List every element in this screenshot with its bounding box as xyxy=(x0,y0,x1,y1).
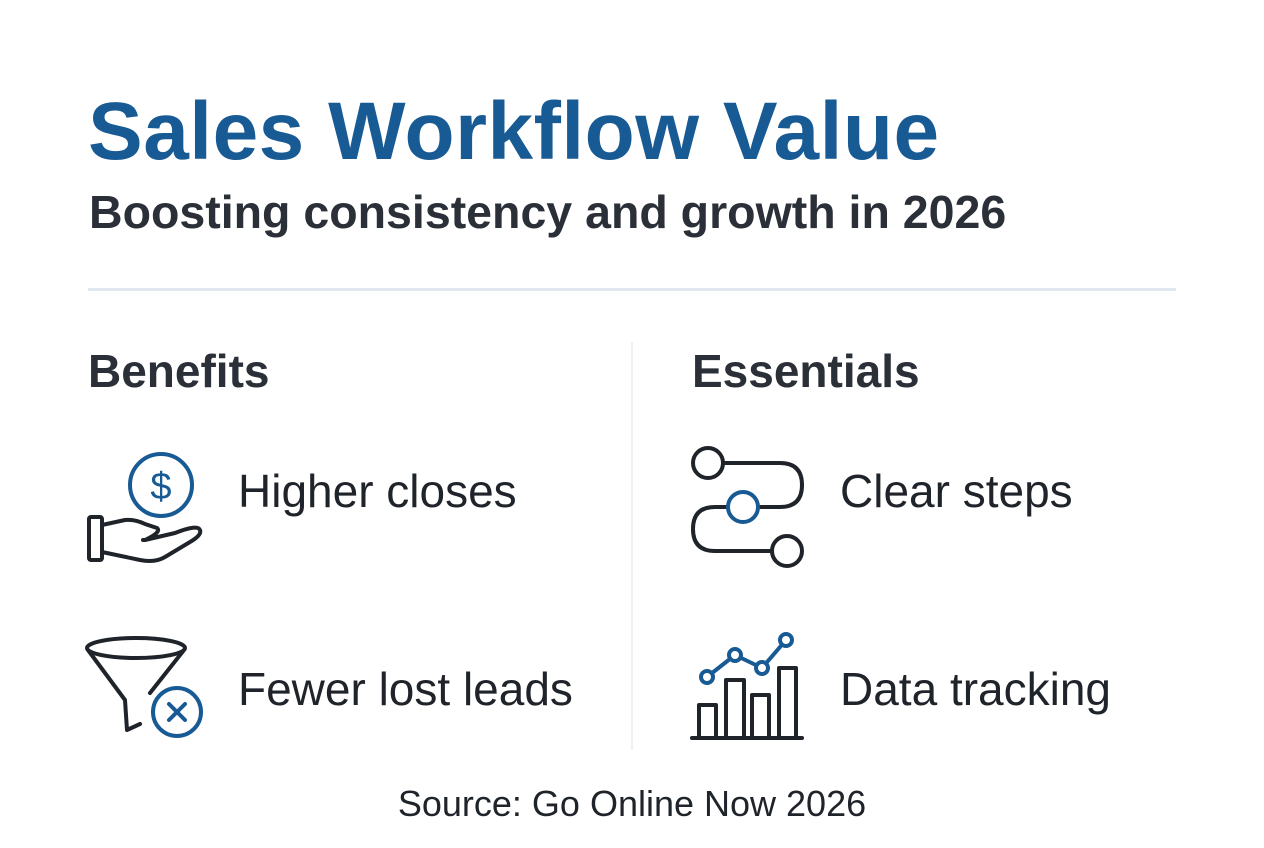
icon: hand with coin xyxy=(89,454,200,561)
heading: essentials: Essentials xyxy=(692,345,920,397)
heading: benefits: Benefits xyxy=(88,345,269,397)
text: clear steps: Clear steps xyxy=(840,465,1073,517)
text: data tracking: Data tracking xyxy=(840,663,1111,715)
text: fewer lost leads: Fewer lost leads xyxy=(238,663,573,715)
icon: hand with coin: $ xyxy=(150,466,172,508)
icon: clear steps xyxy=(693,448,802,566)
source: Source: Go Online Now 2026 xyxy=(398,783,866,824)
subtitle: Boosting consistency and growth in 2026 xyxy=(89,186,1006,238)
title: Sales Workflow Value xyxy=(88,86,940,177)
icon: funnel with x xyxy=(87,638,201,736)
icon: data tracking chart xyxy=(692,634,802,738)
text: higher closes: Higher closes xyxy=(238,465,517,517)
